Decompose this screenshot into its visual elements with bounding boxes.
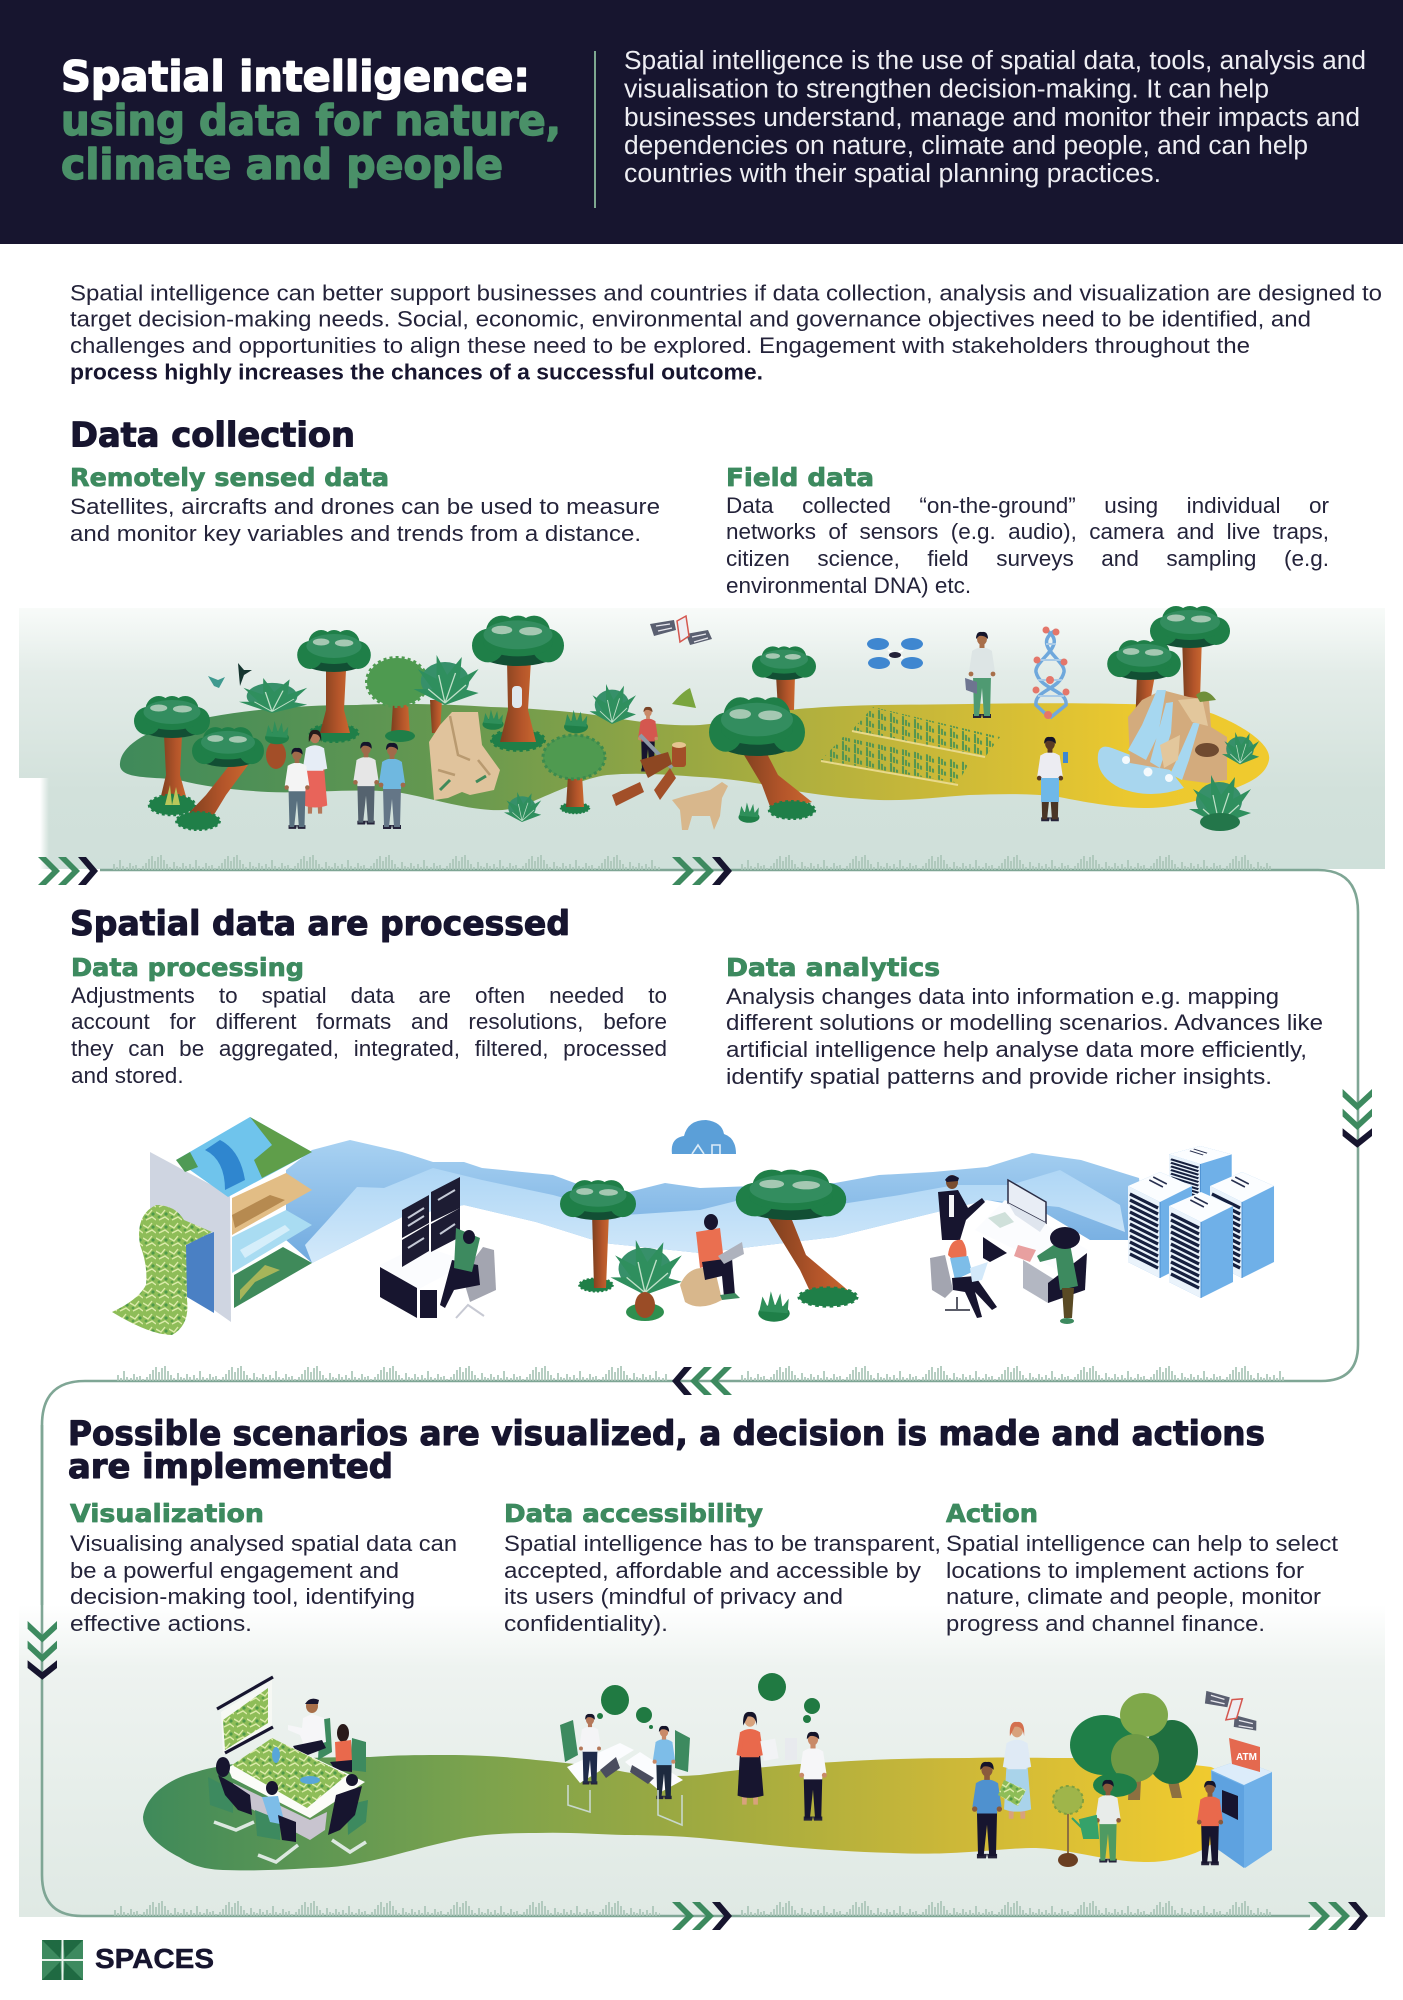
- text: data processing: they can be aggregated, integrated, filtered, processed: [71, 1036, 667, 1061]
- text: data accessibility: its users (mindful of privacy and: [504, 1584, 843, 1609]
- text: remotely sensed data: Satellites, aircrafts and drones can be used to measure: [70, 494, 660, 519]
- small tree: [543, 735, 605, 814]
- two people discussing: [736, 1673, 827, 1821]
- subheading: remotely sensed data: Remotely sensed data: [70, 463, 389, 492]
- heading: data collection: Data collection: [70, 416, 355, 456]
- person at ATM: [1197, 1781, 1223, 1865]
- trees by the waterfall: [1107, 606, 1230, 730]
- text: data processing: Adjustments to spatial data are often needed to: [71, 983, 667, 1008]
- meeting around map table: [208, 1677, 368, 1862]
- title: Spatial intelligence:: [61, 52, 530, 101]
- satellite: [1197, 1684, 1266, 1736]
- group of trees: [1070, 1693, 1198, 1800]
- text: visualization: effective actions.: [70, 1611, 252, 1636]
- subheading: data accessibility: Data accessibility: [504, 1499, 763, 1528]
- arrow: bottom middle chevrons: [672, 1902, 732, 1930]
- office scene: [930, 1175, 1088, 1324]
- arrow: left chevrons: [672, 1367, 732, 1395]
- man and woman at back: [288, 1699, 352, 1772]
- rock formation: [429, 712, 500, 800]
- arrow: middle chevrons: [672, 857, 732, 885]
- intro paragraph: [70, 280, 1382, 384]
- DNA helix: [1032, 626, 1070, 719]
- lumberjack with logs: [612, 707, 686, 806]
- subheading: field data: Field data: [726, 463, 874, 492]
- thought bubbles and co-workers: [560, 1685, 690, 1825]
- header description: countries with their spatial planning practices.: [624, 160, 1161, 188]
- heading: possible scenarios: [68, 1414, 1265, 1487]
- timeline ticks: [112, 854, 1285, 1381]
- people planning and planting: [972, 1722, 1031, 1858]
- text: action: [946, 1531, 1339, 1636]
- text: data accessibility: [504, 1531, 941, 1636]
- text: field data: networks of sensors (e.g. audio), camera and live traps,: [726, 519, 1329, 544]
- panel: data processing illustration: [112, 1117, 1274, 1335]
- ground: green to yellow ribbon: [143, 1755, 1227, 1870]
- text: action: locations to implement actions for: [946, 1558, 1305, 1583]
- header description: dependencies on nature, climate and people, and can help: [624, 132, 1308, 160]
- drone: [867, 638, 923, 669]
- text: field data: [726, 493, 1329, 598]
- tree: [560, 1180, 636, 1292]
- arrow: down chevrons right: [1343, 1089, 1372, 1148]
- tree 3: [297, 630, 371, 742]
- crop fields: [821, 707, 1000, 785]
- satellite: [650, 616, 712, 645]
- title: climate and people: [61, 140, 503, 189]
- tree 4: [472, 616, 564, 750]
- ground: green to yellow landscape: [120, 703, 1269, 810]
- rolled green map: [112, 1205, 212, 1335]
- people talking: [284, 730, 405, 829]
- birds: [208, 663, 252, 688]
- text: data analytics: identify spatial patterns and provide richer insights.: [726, 1064, 1272, 1089]
- text: field data: environmental DNA) etc.: [726, 573, 971, 598]
- text: data analytics: different solutions or modelling scenarios. Advances like: [726, 1010, 1323, 1035]
- text: data processing: and stored.: [71, 1063, 184, 1088]
- title: using data for nature,: [61, 96, 561, 145]
- table base and top: [228, 1738, 365, 1840]
- woman in green: [1037, 1227, 1080, 1324]
- heading: possible scenarios: Possible scenarios are visualized, a decision is made and actions: [68, 1414, 1265, 1454]
- header description: businesses understand, manage and monitor their impacts and: [624, 104, 1360, 132]
- tree 2 leaning: [176, 727, 264, 830]
- arrow: start chevrons: [38, 857, 98, 885]
- arrow: bottom right chevrons: [1308, 1902, 1368, 1930]
- person with phone: [1037, 737, 1068, 821]
- text: data processing: account for different formats and resolutions, before: [71, 1009, 667, 1034]
- desk with monitors and operator: [380, 1177, 496, 1318]
- woman on chair: [930, 1240, 997, 1318]
- text: visualization: [70, 1531, 457, 1636]
- subheading: data analytics: Data analytics: [726, 953, 940, 982]
- text: data accessibility: accepted, affordable and accessible by: [504, 1558, 922, 1583]
- text: action: Spatial intelligence can help to select: [946, 1531, 1339, 1556]
- intro paragraph: challenges and opportunities to align these need to be explored. Engagement with stakeholders throughout the: [70, 333, 1250, 358]
- timeline left vertical and bottom line: [42, 1425, 1310, 1916]
- panel: data collection illustration band: [19, 606, 1385, 870]
- header description: [624, 47, 1366, 188]
- intro paragraph: Spatial intelligence can better support businesses and countries if data collection, analysis and visualization are designed to: [70, 280, 1382, 306]
- intro paragraph: process highly increases the chances of a successful outcome.: [70, 360, 763, 384]
- plants scattered on the ground: [482, 684, 760, 823]
- gardener with watering can: [1072, 1780, 1121, 1863]
- text: data analytics: artificial intelligence help analyse data more efficiently,: [726, 1037, 1307, 1062]
- man standing: [938, 1175, 985, 1240]
- header band: [0, 0, 1403, 244]
- sapling: [1053, 1786, 1083, 1867]
- subheading: action: Action: [946, 1499, 1038, 1528]
- header description: Spatial intelligence is the use of spatial data, tools, analysis and: [624, 47, 1366, 75]
- people and chairs at front: [208, 1757, 368, 1862]
- ATM machine: ATM: [1236, 1752, 1257, 1763]
- panel: visualization and action band: [19, 1425, 1385, 1917]
- text: data analytics: [726, 984, 1323, 1089]
- logo: SPACES: SPACES: [95, 1943, 214, 1974]
- plants by the waterfall: [1189, 732, 1259, 831]
- tree 5: [752, 646, 816, 710]
- logo: SPACES: [42, 1940, 214, 1980]
- text: field data: Data collected “on-the-ground” using individual or: [726, 493, 1329, 518]
- mountains front layer: [305, 1168, 1125, 1263]
- text: remotely sensed data: and monitor key variables and trends from a distance.: [70, 521, 641, 546]
- title: [61, 52, 561, 189]
- wall map: [217, 1677, 273, 1754]
- tree 1: [134, 696, 210, 815]
- text: data accessibility: Spatial intelligence has to be transparent,: [504, 1531, 941, 1556]
- text: action: progress and channel finance.: [946, 1611, 1265, 1636]
- intro paragraph: target decision-making needs. Social, economic, environmental and governance objectives need to be identified, and: [70, 307, 1311, 332]
- text: visualization: be a powerful engagement and: [70, 1558, 399, 1583]
- header description: visualisation to strengthen decision-making. It can help: [624, 76, 1269, 104]
- waterfall: [1098, 690, 1227, 794]
- animal: goat: [672, 782, 728, 830]
- large leaning tree: [736, 1170, 857, 1322]
- ATM machine: [1211, 1738, 1272, 1868]
- person sitting with laptop: [680, 1214, 744, 1307]
- text: visualization: Visualising analysed spatial data can: [70, 1531, 457, 1556]
- text: data processing: [71, 983, 667, 1088]
- scientist with tablet: [965, 632, 995, 718]
- server towers: [1128, 1146, 1274, 1298]
- mountains back layer: [286, 1140, 1145, 1263]
- cloud: [672, 1120, 736, 1154]
- trees of the forest: [134, 606, 1230, 830]
- timeline bottom ticks: [113, 1900, 1272, 1916]
- text: data accessibility: confidentiality).: [504, 1611, 668, 1636]
- chairs at back: [318, 1718, 366, 1772]
- text: data analytics: Analysis changes data into information e.g. mapping: [726, 984, 1279, 1009]
- map layers: [176, 1117, 312, 1308]
- tree 6 large leaning: [709, 697, 815, 819]
- text: visualization: decision-making tool, identifying: [70, 1584, 415, 1609]
- subheading: data processing: Data processing: [71, 953, 304, 982]
- heading: spatial data are processed: Spatial data are processed: [70, 904, 570, 944]
- heading: possible scenarios: are implemented: [68, 1447, 393, 1487]
- palm trees: [367, 655, 479, 742]
- text: remotely sensed data: [70, 494, 660, 546]
- subheading: visualization: Visualization: [70, 1499, 264, 1528]
- text: action: nature, climate and people, monitor: [946, 1584, 1322, 1609]
- palm: [610, 1240, 682, 1321]
- wall with door: [150, 1152, 231, 1322]
- bush and pot plant: [239, 678, 307, 769]
- animals on the rocks: [1195, 691, 1219, 757]
- timeline path connecting sections: [42, 870, 1358, 1700]
- arrow: down chevrons left: [28, 1621, 57, 1680]
- text: field data: citizen science, field surveys and sampling (e.g.: [726, 546, 1329, 571]
